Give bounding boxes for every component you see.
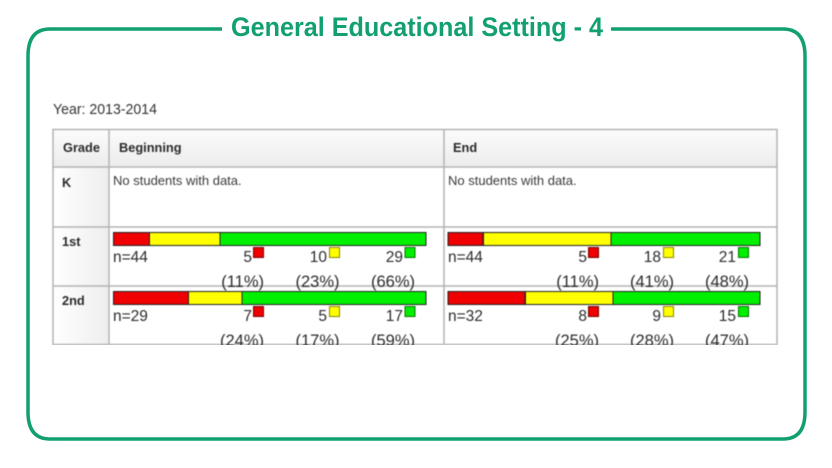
values: 1st end: 21 bbox=[719, 249, 736, 266]
bar: 2nd end bbox=[448, 292, 760, 304]
values: 1st beginning: (66%) bbox=[371, 273, 415, 291]
values: 1st end: (41%) bbox=[630, 273, 674, 291]
row 1st bbox=[62, 232, 760, 291]
values: 2nd end: n=32 bbox=[448, 308, 483, 325]
bar: 1st end bbox=[448, 232, 760, 246]
bar: 1st beginning bbox=[114, 232, 426, 246]
table header: Grade bbox=[63, 140, 100, 155]
values: 1st end: (11%) bbox=[556, 273, 599, 291]
table header: End bbox=[453, 140, 477, 155]
values: 2nd end bbox=[448, 306, 749, 350]
bar: 2nd beginning bbox=[114, 292, 426, 304]
values: 2nd end: (28%) bbox=[630, 332, 674, 350]
values: 2nd beginning: 17 bbox=[386, 308, 403, 325]
values: 2nd beginning: 7 bbox=[243, 308, 252, 325]
values: 1st beginning: n=44 bbox=[113, 249, 148, 266]
row K: No students with data. bbox=[113, 173, 242, 188]
values: 1st beginning: 5 bbox=[243, 249, 252, 266]
values: 2nd beginning: 5 bbox=[318, 308, 327, 325]
values: 2nd beginning: (59%) bbox=[371, 332, 415, 350]
values: 2nd end: (25%) bbox=[555, 332, 599, 350]
values: 1st beginning: (23%) bbox=[295, 273, 340, 291]
values: 2nd beginning: (24%) bbox=[220, 332, 264, 350]
values: 1st end: 5 bbox=[578, 249, 587, 266]
values: 1st beginning: 10 bbox=[310, 249, 327, 266]
values: 1st beginning bbox=[113, 248, 415, 291]
row K: No students with data. bbox=[448, 173, 577, 188]
values: 2nd end: 8 bbox=[578, 308, 587, 325]
values: 2nd end: 15 bbox=[719, 308, 736, 325]
values: 2nd end: (47%) bbox=[705, 332, 749, 350]
values: 1st beginning: 29 bbox=[386, 249, 403, 266]
values: 2nd beginning: n=29 bbox=[113, 308, 148, 325]
row 1st: 1st bbox=[62, 234, 81, 249]
values: 2nd beginning bbox=[113, 306, 415, 350]
values: 1st end: 18 bbox=[644, 249, 661, 266]
values: 1st end: (48%) bbox=[705, 273, 749, 291]
values: 1st end bbox=[448, 248, 749, 291]
values: 2nd end: 9 bbox=[652, 308, 661, 325]
title: General Educational Setting - 4 bbox=[231, 12, 603, 42]
values: 2nd beginning: (17%) bbox=[295, 332, 340, 350]
data table bbox=[53, 129, 777, 350]
values: 1st end: n=44 bbox=[448, 249, 483, 266]
year label: Year: 2013-2014 bbox=[53, 101, 157, 118]
table header bbox=[63, 140, 477, 155]
row K bbox=[62, 174, 576, 188]
table header: Beginning bbox=[119, 140, 182, 155]
row 2nd bbox=[62, 292, 760, 350]
row K: K bbox=[62, 175, 72, 190]
values: 1st beginning: (11%) bbox=[221, 273, 264, 291]
row 2nd: 2nd bbox=[62, 293, 85, 308]
